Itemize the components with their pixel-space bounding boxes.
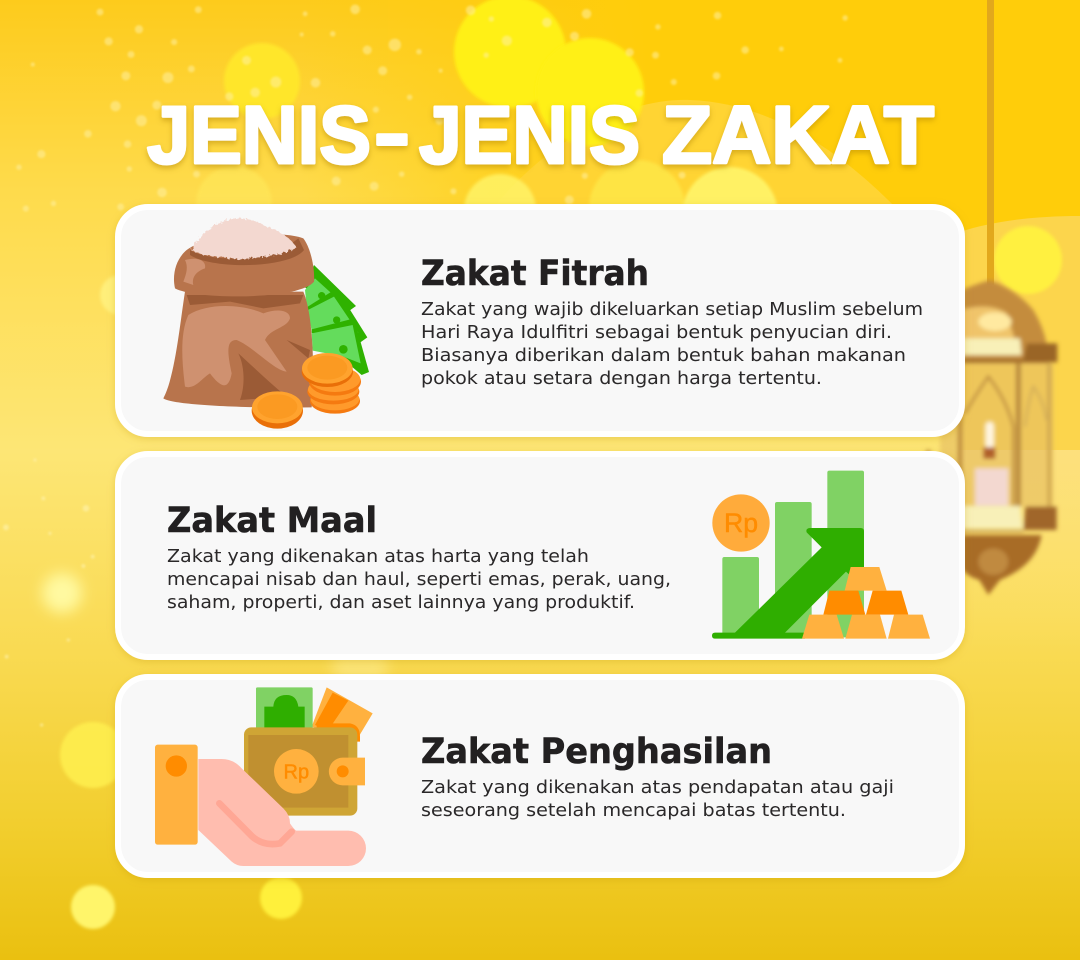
description: pokok atau setara dengan harga tertentu.: [421, 368, 822, 389]
title: -: [374, 88, 410, 179]
icon: hand holding wallet: Rp: [284, 761, 309, 783]
description: [421, 299, 923, 389]
title: JENIS: [419, 90, 640, 181]
icon: hand holding wallet: [155, 687, 373, 866]
panel: Zakat Penghasilan: [118, 677, 962, 875]
heading: Zakat Fitrah: [421, 254, 649, 294]
lantern (blurred): [928, 0, 1057, 595]
panel: Zakat Maal: [118, 454, 962, 657]
icon: growth chart with gold bars: [712, 471, 930, 639]
icon: growth chart with gold bars: Rp: [724, 508, 758, 538]
title: JENIS: [147, 90, 371, 181]
heading: Zakat Penghasilan: [421, 732, 772, 772]
description: Zakat yang dikenakan atas harta yang telah: [167, 546, 589, 567]
description: saham, properti, dan aset lainnya yang produktif.: [167, 592, 635, 613]
description: [167, 546, 671, 613]
description: Zakat yang wajib dikeluarkan setiap Muslim sebelum: [421, 299, 923, 320]
title: [147, 88, 934, 181]
title: ZAKAT: [662, 90, 934, 181]
heading: Zakat Maal: [167, 501, 377, 541]
icon: rice sack with money and coins: [163, 218, 369, 429]
panel: Zakat Fitrah: [118, 207, 962, 434]
description: seseorang setelah mencapai batas tertentu.: [421, 800, 846, 821]
description: mencapai nisab dan haul, seperti emas, perak, uang,: [167, 569, 671, 590]
description: Biasanya diberikan dalam bentuk bahan makanan: [421, 345, 906, 366]
description: [421, 777, 894, 821]
description: Hari Raya Idulfitri sebagai bentuk penyucian diri.: [421, 322, 892, 343]
description: Zakat yang dikenakan atas pendapatan atau gaji: [421, 777, 894, 798]
